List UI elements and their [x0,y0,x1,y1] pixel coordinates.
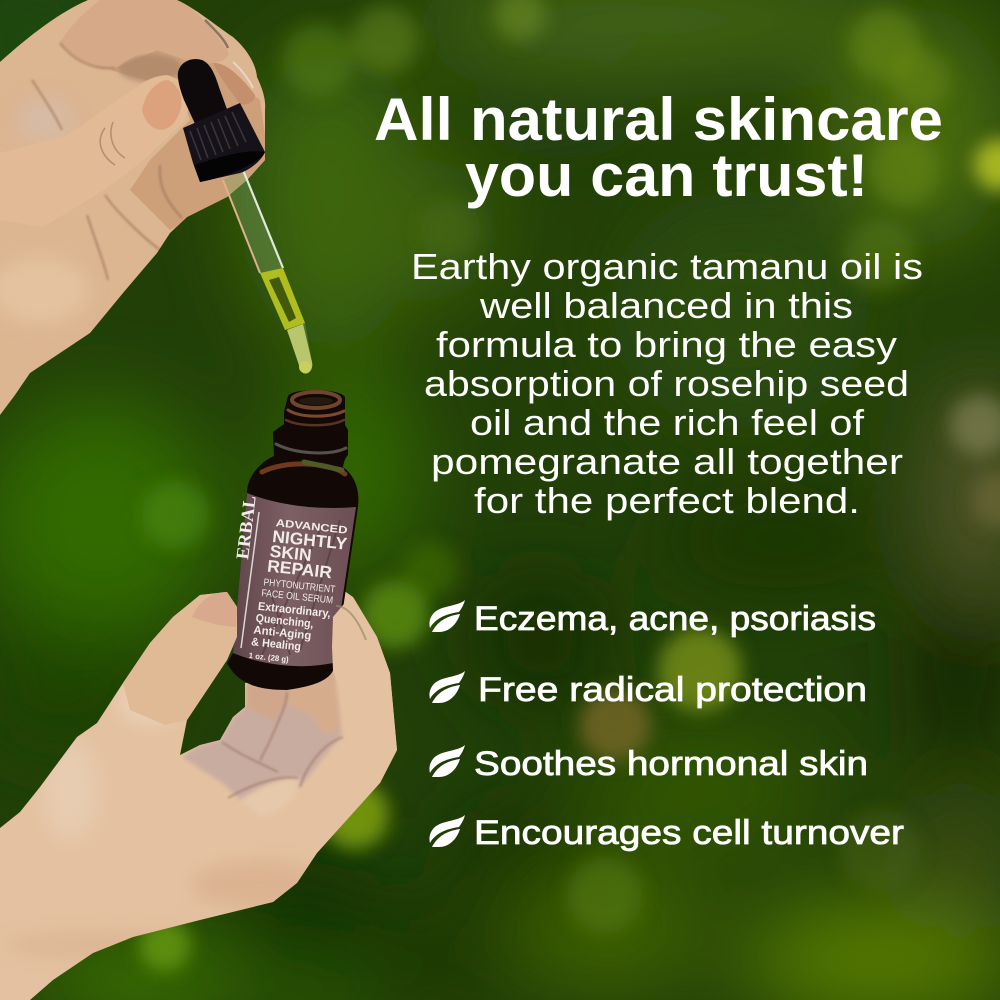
bottle neck highlights [262,392,346,474]
bottle label: Quenching, [255,613,314,631]
palm cushions [182,670,342,817]
thumb and finger in front of the bottle [123,592,397,783]
bottle label: NIGHTLY [271,527,349,554]
lower hand palm behind the bottle [0,590,397,1000]
dropper cap [178,59,265,182]
body paragraph: for the perfect blend. [474,480,860,521]
bottle label [232,493,356,669]
bottle label: Anti-Aging [253,624,312,642]
bottle label: Extraordinary, [257,601,331,620]
bottle label: FACE OIL SERUM [261,588,334,607]
title: you can trust! [465,142,868,209]
benefit: cell turnover: Encourages cell turnover [474,814,904,852]
icon: leaf [429,671,465,703]
glass dropper with yellow oil [223,170,312,374]
title: All natural skincare [374,86,943,153]
benefit: hormonal skin: Soothes hormonal skin [474,745,868,783]
bottle label: ADVANCED [275,517,349,537]
bottle label: & Healing [251,636,302,653]
bottle label: REPAIR [266,557,333,582]
bottle label: SKIN [269,542,313,565]
icon: leaf [429,815,465,847]
benefit: eczema: Eczema, acne, psoriasis [474,600,876,638]
amber serum bottle [227,390,358,690]
body paragraph: Earthy organic tamanu oil is [411,246,923,287]
icon: leaf [429,745,465,777]
bottle label: 1 oz. (28 g) [248,651,289,664]
body paragraph: formula to bring the easy [436,324,897,365]
body paragraph: absorption of rosehip seed [424,363,909,404]
bottle label: PHYTONUTRIENT [263,577,336,596]
title [374,86,943,209]
thumb [0,75,190,227]
upper hand holding the dropper [0,0,270,415]
body paragraph: oil and the rich feel of [470,402,865,443]
bottle label: ERBAL [232,495,260,560]
icon: leaf [429,600,465,632]
body paragraph: well balanced in this [479,285,853,326]
body paragraph: pomegranate all together [431,441,903,482]
body paragraph [411,246,923,521]
benefit: free radical: Free radical protection [478,671,867,709]
